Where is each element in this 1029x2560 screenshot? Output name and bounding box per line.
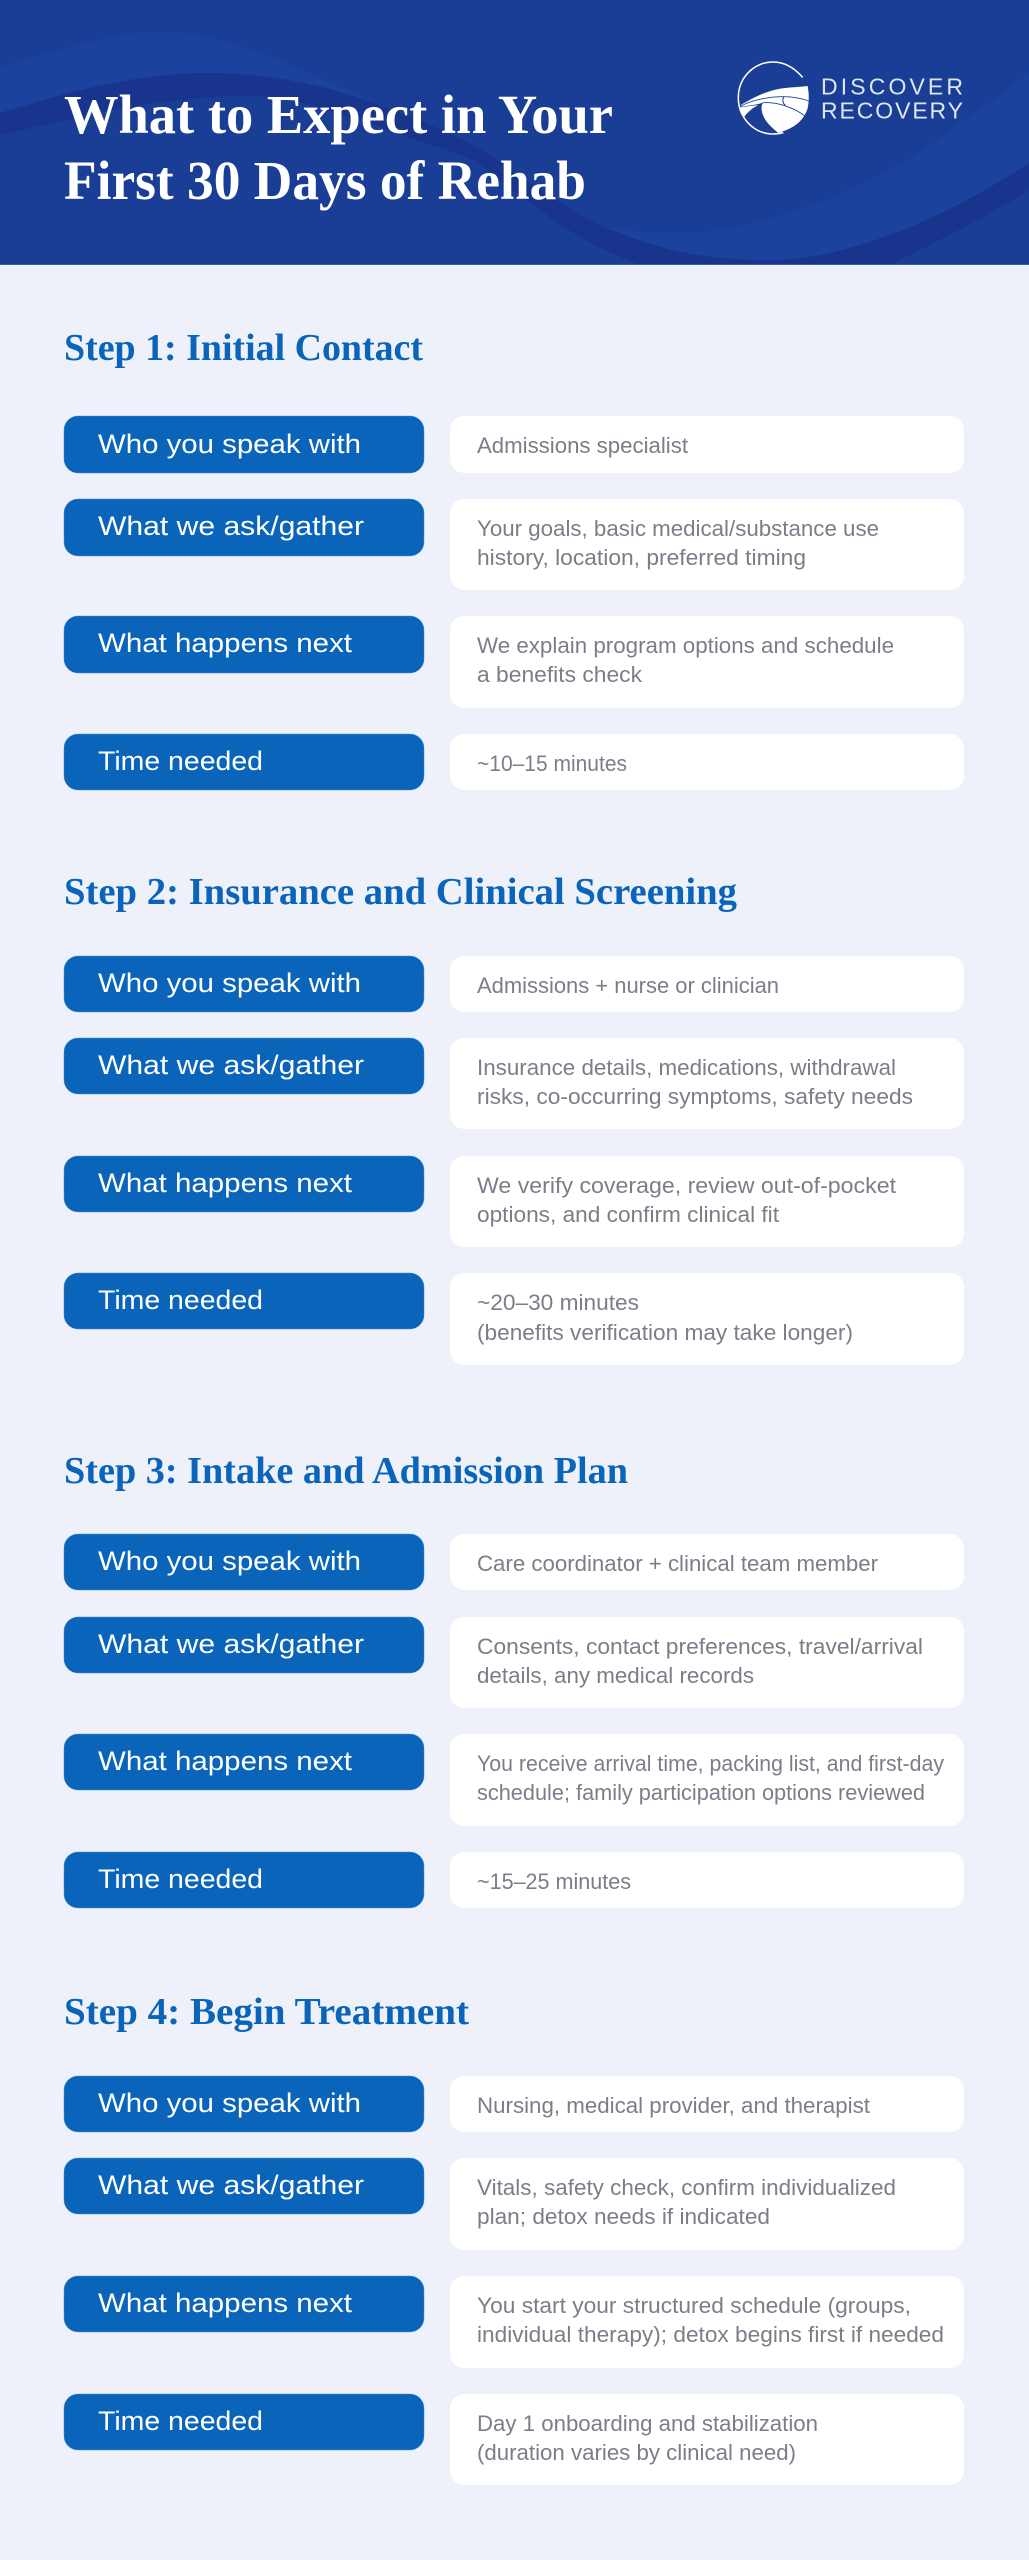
row: what happens next: What happens next xyxy=(98,1168,353,1198)
row: who you speak with: Who you speak with xyxy=(98,429,361,459)
row: what we ask/gather: Your goals, basic medical/substance use xyxy=(477,516,879,541)
row: who you speak with: Who you speak with xyxy=(98,968,361,998)
heading: step 3: Step 3: Intake and Admission Plan xyxy=(64,1450,628,1492)
row: what we ask/gather: history, location, preferred timing xyxy=(477,545,806,570)
row: what we ask/gather: plan; detox needs if indicated xyxy=(477,2204,770,2229)
icon: logo globe xyxy=(738,62,809,134)
row: what we ask/gather: Consents, contact preferences, travel/arrival xyxy=(477,1634,923,1659)
panel: step 2 xyxy=(64,871,964,1365)
header banner xyxy=(0,0,1029,265)
title xyxy=(64,84,613,211)
title: What to Expect in Your xyxy=(64,84,613,145)
row: what we ask/gather: What we ask/gather xyxy=(98,1629,364,1659)
row: what we ask/gather xyxy=(64,1038,964,1129)
row: what happens next: a benefits check xyxy=(477,662,643,687)
row: what we ask/gather: Vitals, safety check, confirm individualized xyxy=(477,2175,896,2200)
row: what happens next: What happens next xyxy=(98,628,353,658)
row: time needed: Time needed xyxy=(98,1285,263,1315)
row: who you speak with: Nursing, medical provider, and therapist xyxy=(477,2093,870,2118)
row: time needed: ~15–25 minutes xyxy=(477,1869,631,1894)
row: what happens next: options, and confirm clinical fit xyxy=(477,1202,779,1227)
row: who you speak with xyxy=(64,1534,964,1590)
row: who you speak with: Care coordinator + clinical team member xyxy=(477,1551,878,1576)
logo: Discover Recovery: DISCOVER xyxy=(821,74,963,100)
heading: step 2: Step 2: Insurance and Clinical Screening xyxy=(64,871,737,913)
row: time needed: (benefits verification may take longer) xyxy=(477,1320,853,1345)
row: who you speak with: Admissions + nurse or clinician xyxy=(477,973,779,998)
row: what happens next xyxy=(64,1156,964,1247)
panel: step 3 xyxy=(64,1450,964,1908)
row: what we ask/gather: What we ask/gather xyxy=(98,511,364,541)
row: who you speak with: Admissions specialist xyxy=(477,433,688,458)
row: what happens next: You start your structured schedule (groups, xyxy=(477,2293,911,2318)
row: time needed xyxy=(64,2394,964,2485)
panel: step 4 xyxy=(64,1991,964,2485)
row: time needed: ~10–15 minutes xyxy=(477,751,627,776)
row: time needed: Time needed xyxy=(98,2406,263,2436)
row: who you speak with: Who you speak with xyxy=(98,2088,361,2118)
row: what happens next xyxy=(64,1734,964,1826)
row: time needed xyxy=(64,1273,964,1365)
row: who you speak with xyxy=(64,956,964,1012)
heading: step 4: Step 4: Begin Treatment xyxy=(64,1991,469,2033)
row: time needed: ~20–30 minutes xyxy=(477,1290,639,1315)
row: what happens next: We explain program options and schedule xyxy=(477,633,894,658)
row: who you speak with: Who you speak with xyxy=(98,1546,361,1576)
row: what we ask/gather: What we ask/gather xyxy=(98,2170,364,2200)
row: what we ask/gather: Insurance details, medications, withdrawal xyxy=(477,1055,896,1080)
row: what happens next: You receive arrival time, packing list, and first-day xyxy=(477,1751,944,1776)
row: what we ask/gather: details, any medical records xyxy=(477,1663,754,1688)
panel: step 1 xyxy=(64,327,964,790)
row: who you speak with xyxy=(64,416,964,473)
row: what happens next: What happens next xyxy=(98,1746,353,1776)
heading: step 1: Step 1: Initial Contact xyxy=(64,327,423,369)
row: time needed: Time needed xyxy=(98,746,263,776)
row: time needed xyxy=(64,1852,964,1908)
title: First 30 Days of Rehab xyxy=(64,150,586,211)
row: what we ask/gather: What we ask/gather xyxy=(98,1050,364,1080)
row: what happens next: What happens next xyxy=(98,2288,353,2318)
row: what we ask/gather xyxy=(64,499,964,590)
row: what happens next: schedule; family participation options reviewed xyxy=(477,1780,925,1805)
row: what we ask/gather xyxy=(64,2158,964,2250)
row: what we ask/gather xyxy=(64,1617,964,1708)
row: what we ask/gather: risks, co-occurring symptoms, safety needs xyxy=(477,1084,913,1109)
row: time needed: Time needed xyxy=(98,1864,263,1894)
row: what happens next: individual therapy); detox begins first if needed xyxy=(477,2322,944,2347)
row: who you speak with xyxy=(64,2076,964,2132)
row: time needed: (duration varies by clinical need) xyxy=(477,2440,796,2465)
row: what happens next: We verify coverage, review out-of-pocket xyxy=(477,1173,896,1198)
row: time needed: Day 1 onboarding and stabilization xyxy=(477,2411,818,2436)
row: time needed xyxy=(64,734,964,790)
row: what happens next xyxy=(64,2276,964,2368)
logo: Discover Recovery: RECOVERY xyxy=(821,98,963,124)
logo: Discover Recovery xyxy=(738,62,963,134)
row: what happens next xyxy=(64,616,964,708)
